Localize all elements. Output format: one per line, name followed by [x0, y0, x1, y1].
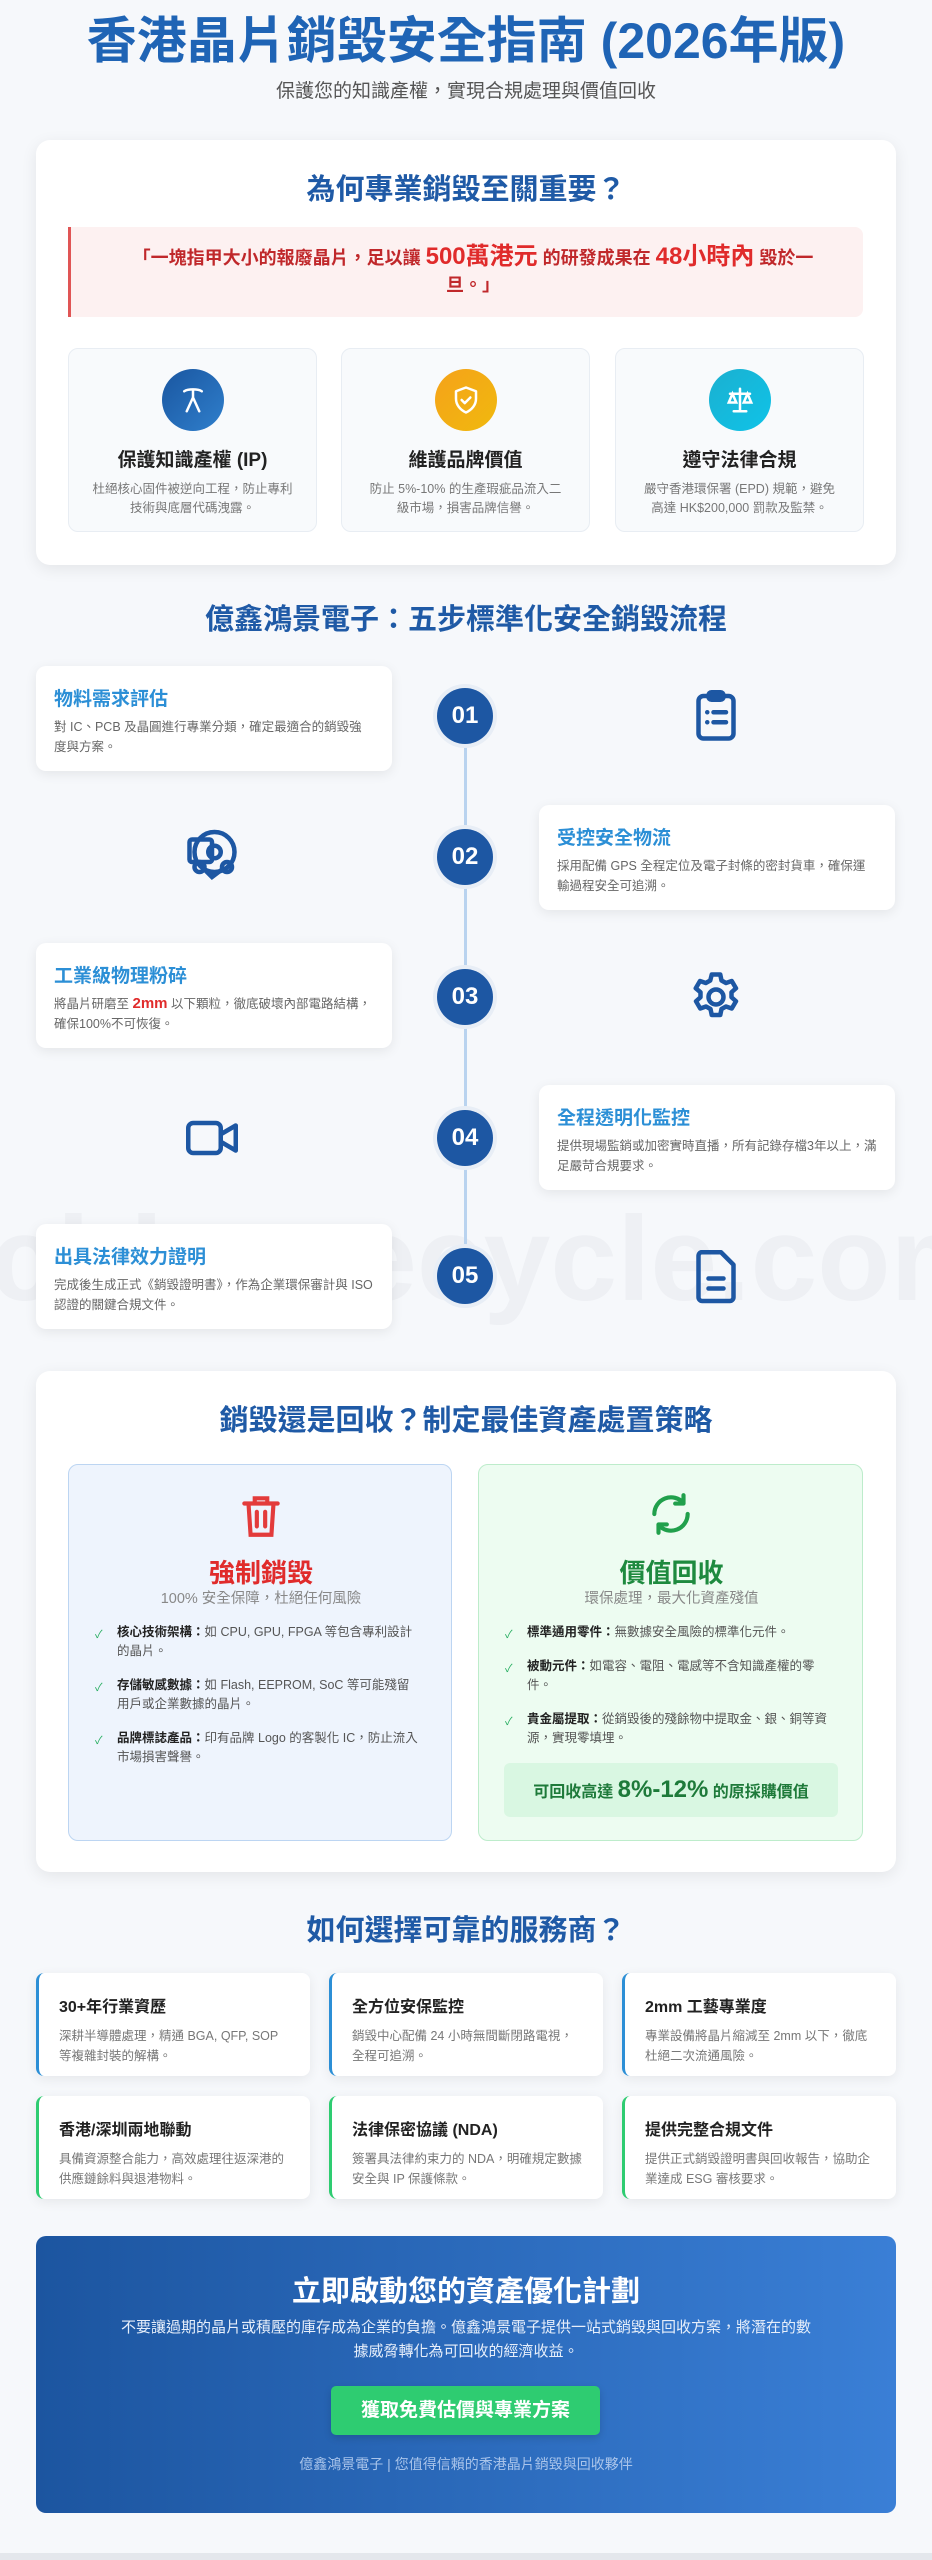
icon: refresh	[652, 1493, 690, 1535]
step 4: 提供現場監銷或加密實時直播，所有記錄存檔3年以上，滿足嚴苛合規要求。	[557, 1139, 876, 1173]
step 5	[36, 1224, 392, 1329]
feature: IP: 杜絕核心固件被逆向工程，防止專利技術與底層代碼洩露。	[92, 482, 292, 515]
heading: 銷毀還是回收？制定最佳資產處置策略	[219, 1405, 712, 1437]
text: 簽署具法律約束力的 NDA，明確規定數據安全與 IP 保護條款。	[352, 2152, 582, 2186]
subpanel: destroy: 存儲敏感數據：如 Flash, EEPROM, SoC 等可能殘留用戶或企業數據的晶片。	[117, 1678, 409, 1711]
callout: value: 可回收高達 8%-12% 的原採購價值	[533, 1776, 809, 1803]
subpanel: destroy: 100% 安全保障，杜絕任何風險	[161, 1591, 361, 1607]
number 01: 01	[452, 702, 478, 729]
CTA panel: 億鑫鴻景電子 | 您值得信賴的香港晶片銷毀與回收夥伴	[299, 2456, 633, 2472]
CTA panel	[36, 2236, 896, 2513]
subpanel: recycle: 價值回收	[619, 1558, 724, 1588]
number 05: 05	[452, 1262, 478, 1289]
CTA panel: 不要讓過期的晶片或積壓的庫存成為企業的負擔。億鑫鴻景電子提供一站式銷毀與回收方案，將潛在的數據威脅轉化為可回收的經濟收益。	[121, 2319, 811, 2360]
number 05	[437, 1248, 493, 1304]
subpanel: destroy	[68, 1464, 452, 1841]
feature: law: 嚴守香港環保署 (EPD) 規範，避免高達 HK$200,000 罰款及監禁。	[644, 482, 835, 515]
text: 銷毀中心配備 24 小時無間斷閉路電視，全程可追溯。	[352, 2029, 573, 2063]
feature: IP	[68, 348, 317, 532]
heading: 為何專業銷毀至關重要？	[306, 174, 626, 206]
icon: trash	[242, 1496, 280, 1537]
quote callout	[68, 227, 863, 317]
number 02	[437, 829, 493, 885]
text: 提供正式銷毀證明書與回收報告，協助企業達成 ESG 審核要求。	[645, 2152, 870, 2186]
step 4	[539, 1085, 895, 1190]
icon: document	[696, 1250, 736, 1304]
step 1	[36, 666, 392, 771]
quote callout: 「一塊指甲大小的報廢晶片，足以讓 500萬港元 的研發成果在 48小時內 毀於一旦。」	[133, 243, 813, 295]
feature: brand	[341, 348, 590, 532]
subpanel: recycle: 被動元件：如電容、電阻、電感等不含知識產權的零件。	[527, 1659, 815, 1692]
step 1: 物料需求評估	[54, 689, 168, 710]
feature: brand: 防止 5%-10% 的生產瑕疵品流入二級市場，損害品牌信譽。	[370, 482, 561, 515]
icon: shield	[434, 369, 496, 431]
step 4: 全程透明化監控	[557, 1108, 690, 1129]
subpanel: recycle: 環保處理，最大化資產殘值	[584, 1591, 758, 1607]
number 03	[437, 969, 493, 1025]
number 03: 03	[452, 983, 478, 1010]
number 04	[437, 1110, 493, 1166]
step 2: 受控安全物流	[557, 828, 671, 849]
icon: logistics	[187, 830, 237, 880]
subpanel: recycle	[478, 1464, 863, 1841]
text: 提供完整合規文件	[645, 2122, 773, 2139]
timeline line	[464, 716, 467, 1276]
bottom band	[0, 2553, 932, 2560]
subtitle: 保護您的知識產權，實現合規處理與價值回收	[276, 81, 656, 102]
text: 香港/深圳兩地聯動	[59, 2122, 191, 2139]
grid cards: 30+年行業資歷	[59, 1999, 166, 2016]
subpanel: recycle: 貴金屬提取：從銷毀後的殘餘物中提取金、銀、銅等資源，實現零填埋。	[527, 1712, 827, 1745]
button	[331, 2386, 600, 2435]
grid cards: 深耕半導體處理，精通 BGA, QFP, SOP 等複雜封裝的解構。	[59, 2029, 278, 2063]
callout: value	[504, 1763, 838, 1817]
button: 獲取免費估價與專業方案	[361, 2400, 570, 2421]
icon: compass	[162, 369, 224, 431]
subpanel: destroy: 強制銷毀	[209, 1558, 313, 1588]
feature: law	[615, 348, 864, 532]
icon: gear	[693, 972, 738, 1018]
icon: clipboard	[696, 690, 736, 741]
number 01	[437, 688, 493, 744]
subpanel: destroy: 品牌標誌產品：印有品牌 Logo 的客製化 IC，防止流入市場損害聲譽。	[117, 1731, 418, 1764]
number 04: 04	[452, 1124, 478, 1151]
feature: brand: 維護品牌價值	[408, 450, 522, 471]
step 2: 採用配備 GPS 全程定位及電子封條的密封貨車，確保運輸過程安全可追溯。	[557, 859, 865, 893]
text: 具備資源整合能力，高效處理往返深港的供應鏈餘料與退港物料。	[59, 2152, 284, 2186]
step 2	[539, 805, 895, 910]
subpanel: destroy: 核心技術架構：如 CPU, GPU, FPGA 等包含專利設計的晶片。	[117, 1625, 412, 1658]
step 3: 工業級物理粉碎	[54, 966, 187, 987]
text: 全方位安保監控	[352, 1999, 464, 2016]
text: 法律保密協議 (NDA)	[352, 2122, 498, 2139]
text: 專業設備將晶片縮減至 2mm 以下，徹底杜絕二次流通風險。	[645, 2029, 867, 2063]
icon: scales	[708, 369, 770, 431]
CTA panel: 立即啟動您的資產優化計劃	[292, 2276, 640, 2308]
panel: destroy or recycle	[36, 1371, 896, 1872]
feature: law: 遵守法律合規	[682, 450, 796, 471]
step 5: 完成後生成正式《銷毀證明書》，作為企業環保審計與 ISO 認證的關鍵合規文件。	[54, 1278, 373, 1312]
heading: choose provider: 如何選擇可靠的服務商？	[306, 1915, 626, 1947]
title: 香港晶片銷毀安全指南 (2026年版)	[87, 13, 845, 69]
number 02: 02	[452, 843, 478, 870]
panel: why important	[36, 140, 896, 565]
subpanel: recycle: 標準通用零件：無數據安全風險的標準化元件。	[527, 1625, 790, 1639]
step 1: 對 IC、PCB 及晶圓進行專業分類，確定最適合的銷毀強度與方案。	[54, 720, 362, 754]
step 3	[36, 943, 392, 1048]
feature: IP: 保護知識產權 (IP)	[118, 450, 267, 471]
step 3: 將晶片研磨至 2mm 以下顆粒，徹底破壞內部電路結構，確保100%不可恢復。	[54, 995, 371, 1031]
icon: video	[186, 1120, 238, 1156]
grid cards	[36, 1973, 310, 2076]
text: 2mm 工藝專業度	[645, 1999, 767, 2016]
heading: five steps: 億鑫鴻景電子：五步標準化安全銷毀流程	[205, 604, 727, 636]
step 5: 出具法律效力證明	[54, 1247, 206, 1268]
